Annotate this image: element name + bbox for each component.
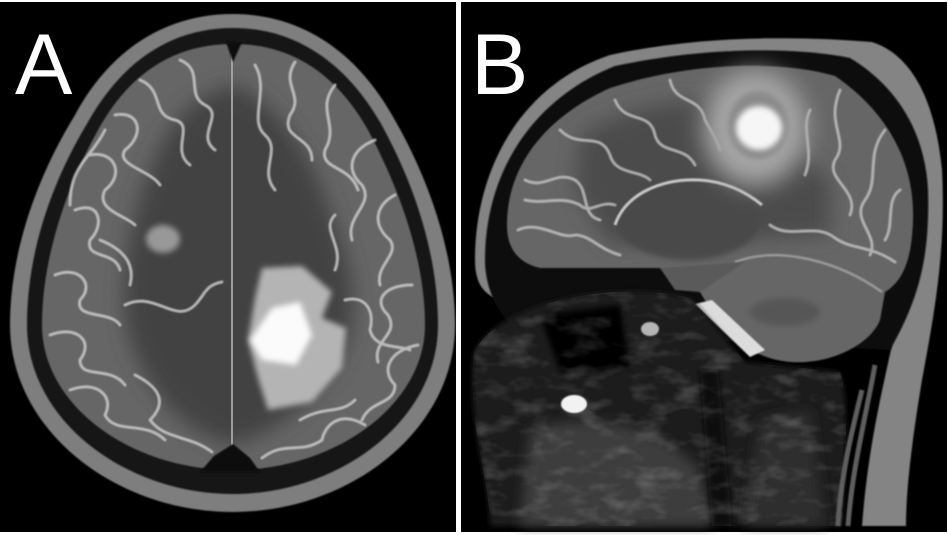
label A: A — [15, 17, 73, 113]
neck muscle stripes — [838, 365, 875, 526]
brain — [42, 44, 425, 470]
gyri bright lines — [50, 60, 418, 458]
gyri B — [518, 80, 900, 262]
tentorium — [735, 255, 882, 292]
panel B: sagittal MRI — [461, 2, 947, 532]
face and neck tissue — [470, 280, 850, 526]
pons — [660, 262, 745, 292]
brain — [507, 66, 913, 362]
large lesion: edema — [248, 266, 346, 410]
lesion ring — [728, 91, 788, 159]
panel A: axial MRI — [0, 2, 456, 532]
cerebellum white matter — [750, 298, 820, 326]
white matter B — [575, 101, 830, 245]
skull dark ring — [27, 28, 438, 494]
bright spot midline — [641, 322, 659, 336]
face texture — [470, 280, 850, 526]
brainstem bright CSF — [695, 300, 765, 357]
scalp — [475, 38, 943, 526]
lesion edema — [703, 70, 807, 186]
lesion core — [736, 106, 782, 150]
label B: B — [471, 17, 528, 113]
large lesion: core — [250, 302, 312, 365]
bright spot lower left — [561, 395, 587, 413]
white matter — [124, 85, 353, 445]
skull dark — [485, 50, 928, 350]
scalp ring — [10, 14, 455, 512]
small left lesion — [146, 225, 180, 253]
thalamus — [616, 180, 760, 260]
midline falx — [231, 44, 233, 465]
